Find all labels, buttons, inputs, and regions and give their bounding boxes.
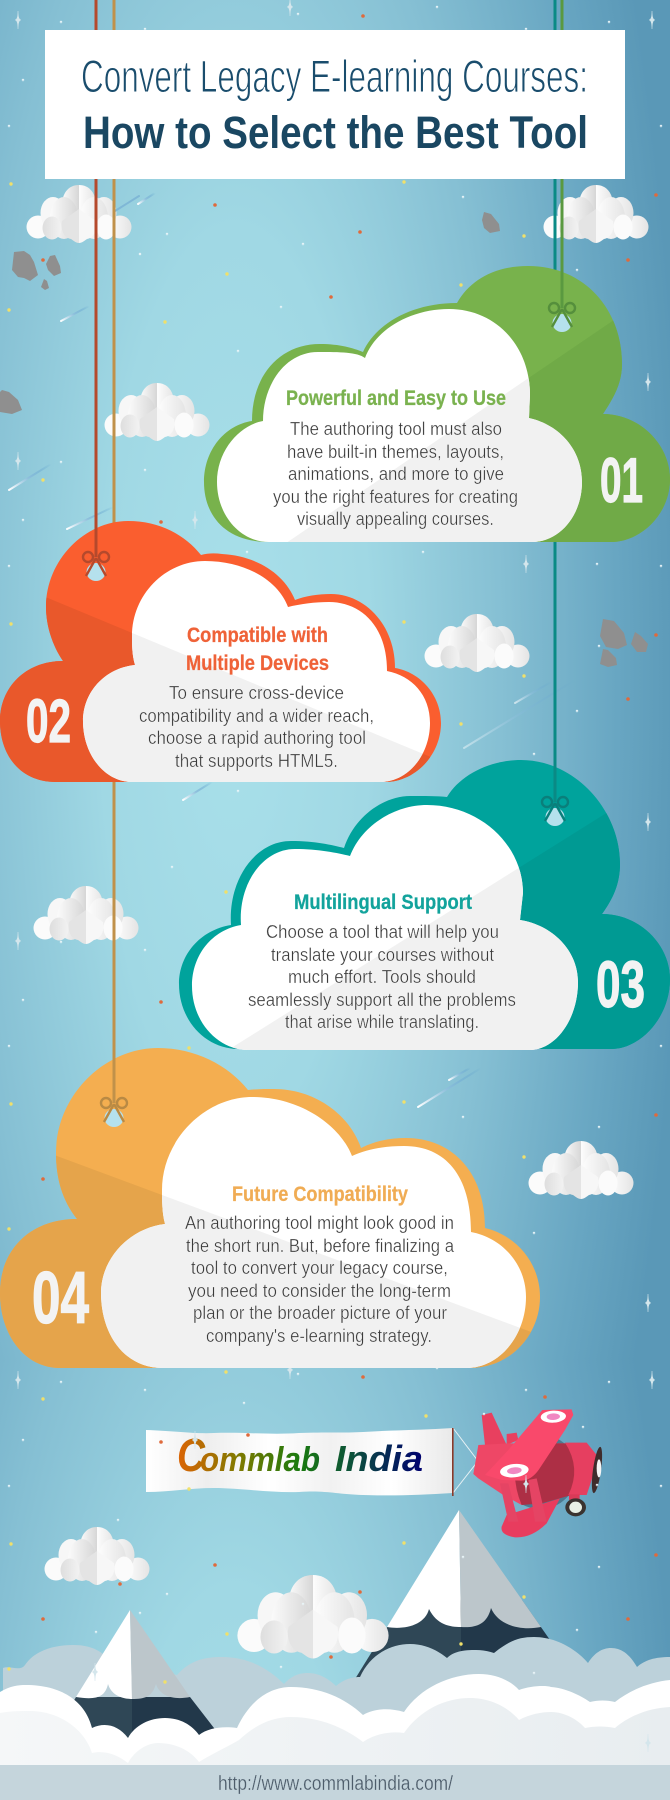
banner with logo: C <box>177 1429 206 1481</box>
body 03 <box>248 922 516 1032</box>
rocks <box>0 212 648 667</box>
shooting stars <box>9 193 575 1107</box>
gold rope with bow <box>101 0 127 1127</box>
body 03: Choose a tool that will help you <box>266 922 499 942</box>
body 01: The authoring tool must also <box>290 419 502 439</box>
red biplane <box>473 1409 604 1537</box>
body 02: choose a rapid authoring tool <box>148 728 366 748</box>
body 02: that supports HTML5. <box>175 751 338 771</box>
number 01: 01 <box>600 446 643 516</box>
body 04: company's e-learning strategy. <box>206 1326 432 1346</box>
footer band: http://www.commlabindia.com/ <box>218 1773 453 1795</box>
banner with logo: India <box>335 1438 423 1479</box>
panel 01: powerful and easy to use cloud <box>204 266 670 542</box>
body 01: have built-in themes, layouts, <box>287 442 504 462</box>
white cloud layer <box>0 1674 670 1800</box>
body 02: compatibility and a wider reach, <box>139 706 374 726</box>
body 01: you the right features for creating <box>273 487 518 507</box>
body 01: visually appealing courses. <box>297 509 494 529</box>
body 03: translate your courses without <box>271 945 494 965</box>
heading 02: Multiple Devices <box>186 652 329 675</box>
heading 02: Compatible with <box>187 624 328 647</box>
number 04: 04 <box>32 1258 89 1339</box>
footer band <box>0 1765 670 1800</box>
paper cloud 6 <box>528 1141 634 1199</box>
heading 03: Multilingual Support <box>294 891 472 914</box>
body 04: the short run. But, before finalizing a <box>186 1236 455 1256</box>
body 01 <box>273 419 518 529</box>
body 03: seamlessly support all the problems <box>248 990 516 1010</box>
paper cloud 5 <box>34 886 138 944</box>
body 04: you need to consider the long-term <box>188 1281 451 1301</box>
paper cloud 3 <box>104 383 210 441</box>
body 02 <box>139 683 374 771</box>
green rope with bow <box>549 0 575 332</box>
pale front cloud layer <box>0 1698 670 1800</box>
body 03: much effort. Tools should <box>288 967 476 987</box>
heading 04: Future Compatibility <box>232 1183 408 1206</box>
body 04: plan or the broader picture of your <box>193 1303 447 1323</box>
banner with logo: ommlab <box>200 1441 320 1479</box>
panel 03: multilingual support cloud <box>179 760 670 1050</box>
paper cloud 2 <box>544 185 648 243</box>
large mountain <box>342 1510 592 1700</box>
panel 02: compatible with multiple devices cloud <box>0 521 441 782</box>
number 02: 02 <box>26 687 71 755</box>
banner with logo <box>146 1428 478 1496</box>
title box <box>45 30 625 179</box>
paper cloud 8 (large) <box>237 1575 389 1659</box>
body 02: To ensure cross-device <box>169 683 344 703</box>
body 01: animations, and more to give <box>288 464 504 484</box>
heading 02 <box>186 624 329 675</box>
number 03: 03 <box>596 947 645 1021</box>
red rope with bow <box>83 0 109 581</box>
heading 01: Powerful and Easy to Use <box>286 387 506 410</box>
body 04: tool to convert your legacy course, <box>191 1258 448 1278</box>
paper cloud 7 <box>44 1527 150 1585</box>
title line 2: How to Select the Best Tool <box>83 107 588 158</box>
back cloud layer <box>3 1637 670 1790</box>
body 03: that arise while translating. <box>285 1012 479 1032</box>
paper cloud 1 <box>26 185 132 243</box>
body 04 <box>185 1213 455 1346</box>
paper cloud 4 <box>424 614 530 672</box>
panel 04: future compatibility cloud <box>0 1048 540 1368</box>
teal rope with bow <box>542 0 568 826</box>
small mountain <box>40 1610 240 1760</box>
body 04: An authoring tool might look good in <box>185 1213 454 1233</box>
